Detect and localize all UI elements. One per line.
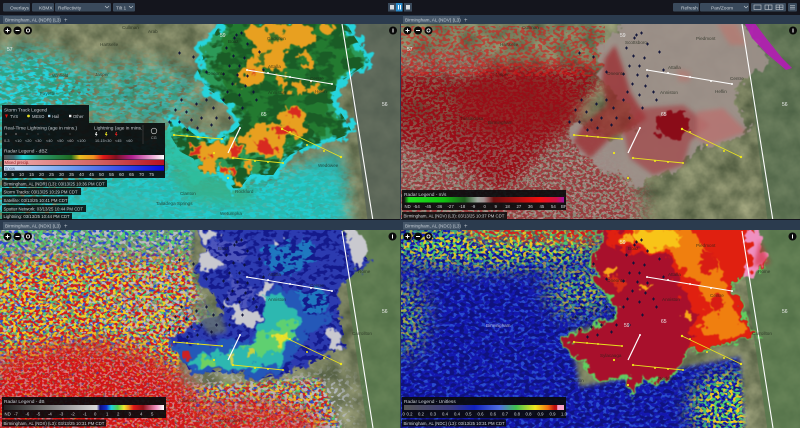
lightning legend: <20 — [25, 139, 31, 143]
radar legend: velocity: 54 — [551, 204, 556, 209]
radar legend: reflectivity: 50 — [99, 172, 105, 177]
panel: differential reflectivity map (bottom left) — [0, 230, 400, 428]
radar legend: unitless: 0.9 — [550, 412, 556, 416]
speed and height values: bottom left: 56 — [382, 309, 388, 315]
radar legend: decibels: 1 — [106, 412, 109, 416]
toolbar select: pan zoom — [700, 3, 749, 12]
timestamp: bottom left — [2, 420, 106, 426]
map labels: bottom left: Wetumpka — [218, 418, 240, 423]
radar legend: velocity: 9 — [494, 204, 498, 209]
map labels: top left: Rockford — [235, 189, 254, 194]
storm track legend: TVS — [10, 114, 18, 119]
radar legend: unitless: 0.2 — [418, 412, 425, 416]
radar legend: decibels: -5 — [36, 412, 41, 416]
timestamps: top left: Satellite: 03/13/25 10:41 PM CDT — [4, 198, 68, 203]
map labels: top right: Birmingham — [488, 120, 513, 125]
lightning legend: 10-15 — [95, 139, 105, 143]
panel: correlation coefficient map (bottom right) — [401, 230, 800, 428]
speed and height values: top left — [7, 33, 388, 118]
map labels: top left: Boaz — [228, 39, 239, 44]
timestamps: top left — [2, 180, 107, 220]
map labels: bottom right: Clanton — [568, 378, 584, 383]
toolbar select: pan zoom: Pan/Zoom — [711, 5, 733, 11]
radar legend: reflectivity: 75 — [149, 172, 155, 177]
tab bar: top left — [0, 15, 400, 24]
radar legend: velocity: 27 — [516, 204, 522, 209]
map labels: top right: Hartselle — [500, 42, 519, 47]
lightning legend: <100 — [77, 139, 86, 143]
storm track legend: Hail — [52, 114, 59, 119]
radar legend: unitless — [402, 397, 568, 418]
map labels: bottom left: Clanton — [180, 398, 196, 403]
map labels: top left: Wedowee — [318, 163, 339, 168]
lightning legend: <10 — [15, 139, 21, 143]
storm track legend: MESO — [32, 114, 45, 119]
radar legend: decibels: 0 — [94, 412, 97, 416]
toolbar button: refresh — [673, 3, 699, 12]
radar legend: reflectivity: Snow — [4, 166, 16, 171]
map labels: top left: Hartselle — [100, 42, 119, 47]
map labels: top left: Jasper — [95, 72, 109, 77]
tab bar: top right: + — [464, 18, 468, 24]
radar legend: reflectivity: 65 — [129, 172, 135, 177]
radar legend: reflectivity: 70 — [139, 172, 145, 177]
lightning legend: <40 — [46, 139, 52, 143]
radar legend: decibels: -6 — [26, 412, 30, 416]
map labels: top left: Arab — [148, 29, 158, 34]
radar legend: unitless: 1.0 — [561, 412, 568, 416]
lightning legend: <60 — [67, 139, 73, 143]
radar legend: reflectivity: 40 — [79, 172, 85, 177]
speed and height values: bottom right: 65 — [661, 319, 667, 325]
map labels: bottom right: Attalla — [668, 272, 681, 277]
playback controls — [388, 3, 412, 12]
layout buttons — [751, 3, 786, 12]
radar legend: reflectivity: 25 — [49, 172, 55, 177]
timestamps: top left: Lightning: 03/13/25 10:44 PM CDT — [4, 214, 70, 219]
radar legend: reflectivity: 5 — [12, 172, 14, 177]
toolbar button: overlays — [3, 3, 30, 12]
map labels: top left: Centre — [310, 76, 324, 81]
speed and height values: top left: 56 — [382, 102, 388, 108]
map labels: top right: Scottsboro — [625, 40, 647, 45]
toolbar button: overlays: Overlays — [10, 5, 30, 11]
lightning legend: <30 — [35, 139, 41, 143]
map labels: bottom right: Oneonta — [607, 278, 625, 283]
panel: reflectivity map (top left) — [0, 24, 400, 219]
speed and height values: top right: 56 — [782, 102, 788, 108]
radar legend: unitless: 0 — [402, 412, 406, 416]
radar legend: reflectivity: 30 — [59, 172, 65, 177]
map labels: bottom right: Piedmont — [696, 243, 716, 248]
map labels: bottom right: Rome — [758, 269, 771, 274]
radar legend: velocity: -45 — [425, 204, 432, 209]
radar legend: unitless: 0.5 — [466, 412, 472, 416]
map labels: top left: Oneonta — [207, 71, 225, 76]
radar legend: decibels: ND — [4, 412, 11, 416]
lightning legend: Real-Time Lightning (age in mins.) — [4, 126, 78, 132]
map labels: top left: Cullman — [122, 25, 139, 30]
lightning legend: <45 — [115, 139, 121, 143]
lightning legend: CG — [151, 136, 157, 140]
storm track legend: Other — [73, 114, 84, 119]
radar legend: decibels: -4 — [48, 412, 52, 416]
radar legend: decibels: 4 — [140, 412, 143, 416]
speed and height values: top left: 57 — [7, 47, 13, 53]
map labels: bottom right: Carrollton — [752, 331, 772, 336]
radar legend: decibels — [2, 397, 166, 418]
radar legend: unitless: 0.9 — [538, 412, 544, 416]
radar legend: velocity: -18 — [459, 204, 466, 209]
toolbar select: product — [55, 3, 111, 12]
radar legend: unitless: 0.6 — [478, 412, 484, 416]
lightning legend: <30 — [105, 139, 111, 143]
radar legend: reflectivity: 20 — [39, 172, 45, 177]
map labels: bottom right: Rockford — [658, 376, 677, 381]
map controls: top left — [4, 26, 397, 34]
radar legend: decibels: -1 — [83, 412, 87, 416]
speed and height values: bottom right — [620, 240, 788, 329]
map labels: top right: Cullman — [522, 25, 539, 30]
map labels: bottom left: Boaz — [218, 246, 229, 251]
radar legend: velocity: ND — [404, 204, 411, 209]
map labels: top left: Anniston — [268, 90, 286, 95]
radar legend: unitless: 0.4 — [454, 412, 461, 416]
radar legend: velocity — [402, 190, 567, 210]
map labels: top right: Heflin — [715, 89, 727, 94]
tab bar: top left: Birmingham, AL (NDR) (L3) — [5, 18, 61, 22]
speed and height values: top right: 59 — [620, 33, 626, 39]
timestamp: bottom left: Birmingham, AL (NDX) (L3): 03/13/25 10:31 PM CDT — [4, 421, 105, 426]
radar legend: unitless: Radar Legend - Unitless — [404, 399, 456, 405]
storm track legend: Storm Track Legend — [4, 108, 48, 114]
map labels: top left: Gadsden — [267, 36, 286, 41]
radar legend: decibels: -2 — [71, 412, 75, 416]
menu button — [788, 3, 797, 12]
tab bar: bottom right: Birmingham, AL (NDC) (L3) — [405, 224, 461, 228]
radar legend: unitless: 0.6 — [490, 412, 497, 416]
tab bar: bottom left: Birmingham, AL (NDX) (L3) — [5, 224, 61, 228]
map controls: top right — [404, 26, 797, 34]
speed and height values: bottom right: 59 — [624, 323, 630, 329]
radar legend: reflectivity: 0 — [4, 172, 7, 177]
map labels: top right: Jasper — [495, 72, 509, 77]
map labels: bottom left: Rome — [358, 269, 371, 274]
radar legend: reflectivity — [2, 146, 165, 178]
map labels: top left: Winfield — [52, 73, 69, 78]
map controls: bottom left — [4, 232, 396, 240]
radar legend: reflectivity: 15 — [29, 172, 35, 177]
timestamp: top right: Birmingham, AL (NDV) (L3): 03/13/25 10:37 PM CDT — [404, 213, 505, 218]
panel: velocity map (top right) — [401, 24, 800, 219]
tab bar: top right: Birmingham, AL (NDV) (L3) — [405, 18, 461, 22]
radar legend: reflectivity: 55 — [109, 172, 115, 177]
speed and height values: top left: 59 — [220, 33, 226, 39]
radar legend: velocity: -27 — [448, 204, 454, 209]
radar legend: velocity: -36 — [436, 204, 443, 209]
speed and height values: top right: 57 — [407, 47, 413, 53]
tab bar: bottom left — [0, 220, 400, 230]
map labels: bottom right: Centre — [710, 293, 724, 298]
radar legend: reflectivity: 60 — [119, 172, 125, 177]
lightning legend: <50 — [57, 139, 63, 143]
radar legend: reflectivity: 10 — [19, 172, 25, 177]
speed and height values: bottom right: 59 — [620, 240, 626, 246]
map labels: top left: Fayette — [40, 91, 56, 96]
tab bar: top right — [401, 15, 800, 24]
speed and height values: bottom right: 56 — [782, 309, 788, 315]
speed and height values: top left: 65 — [261, 112, 267, 118]
map labels: bottom left: Carrollton — [352, 331, 372, 336]
radar legend: decibels: Radar Legend - dB — [4, 399, 45, 405]
lightning legend: Lightning (age in mins.) — [94, 126, 144, 132]
radar legend: reflectivity: Radar Legend - dBZ — [4, 148, 48, 154]
map labels: top right: Piedmont — [696, 36, 716, 41]
speed and height values: top right: 65 — [661, 112, 667, 118]
radar legend: decibels: -3 — [60, 412, 64, 416]
radar legend: reflectivity: 35 — [69, 172, 75, 177]
lightning legend: 0-3 — [4, 139, 10, 143]
map labels: top left: Talladega Springs — [156, 201, 193, 206]
tab bar: top left: + — [64, 18, 68, 24]
radar legend: velocity: 18 — [505, 204, 510, 209]
map labels: top left: Clanton — [180, 191, 196, 196]
radar legend: decibels: 2 — [117, 412, 120, 416]
radar legend: unitless: 0.4 — [442, 412, 449, 416]
timestamps: top left: Storm Tracks: 03/13/25 10:29 PM CDT — [4, 189, 78, 194]
map labels: top left: Attalla — [268, 64, 281, 69]
toolbar select: tilt: Tilt 1 — [116, 5, 127, 11]
map labels: top right: Anniston — [660, 90, 678, 95]
radar legend: velocity: BF — [561, 204, 567, 209]
storm track legend — [2, 105, 89, 123]
radar legend: reflectivity: Mixed precip. — [4, 160, 29, 165]
map labels: top right: Centre — [730, 76, 744, 81]
radar legend: velocity: 0 — [484, 204, 486, 209]
map labels: bottom left: Centre — [310, 283, 324, 288]
lightning legend — [2, 123, 165, 146]
radar legend: velocity: 36 — [528, 204, 533, 209]
radar legend: unitless: 0.2 — [406, 412, 413, 416]
toolbar button: radar site — [32, 3, 54, 12]
map labels: top right: Tuscaloosa — [460, 116, 484, 121]
timestamps: top left: Spotter Network: 03/13/25 10:44 PM CDT — [4, 206, 83, 211]
radar legend: unitless: 0.7 — [502, 412, 509, 416]
map labels: bottom right — [486, 243, 772, 383]
map labels: bottom right: Birmingham — [486, 323, 511, 328]
map labels: bottom left — [180, 246, 372, 423]
radar legend: decibels: 5 — [151, 412, 154, 416]
speed and height values: top right — [407, 33, 788, 118]
map labels: top right: Attalla — [668, 65, 681, 70]
toolbar button: refresh: Refresh — [681, 5, 698, 11]
radar legend: velocity: -54 — [414, 204, 420, 209]
map labels: top right — [460, 25, 744, 125]
map labels: top right: Oneonta — [607, 71, 625, 76]
map labels: bottom right: Sylacauga — [600, 353, 622, 358]
radar legend: decibels: 3 — [128, 412, 132, 416]
timestamp: top right — [402, 212, 507, 219]
timestamps: top left: Birmingham, AL (NDR) (L3): 03/13/25 10:36 PM CDT — [4, 181, 105, 186]
tab bar: bottom left: + — [64, 224, 68, 230]
radar legend: reflectivity: 45 — [89, 172, 95, 177]
radar legend: unitless: 0.8 — [514, 412, 521, 416]
map labels: top left: Wetumpka — [220, 211, 242, 216]
toolbar select: product: Reflectivity — [58, 5, 82, 11]
tab bar: bottom right: + — [464, 224, 468, 230]
tab bar: bottom right — [401, 220, 800, 230]
radar legend: decibels: -7 — [14, 412, 18, 416]
radar legend: unitless: 0.3 — [430, 412, 437, 416]
toolbar select: tilt — [113, 3, 135, 12]
map labels: top left: Heflin — [315, 89, 327, 94]
toolbar button: radar site: KBMX — [39, 5, 53, 11]
map labels: top left — [40, 25, 339, 216]
map labels: bottom right: Boaz — [628, 246, 639, 251]
map labels: bottom left: Anniston — [268, 297, 286, 302]
top toolbar — [0, 0, 800, 15]
map labels: bottom left: Attalla — [268, 272, 281, 277]
timestamp: bottom right: Birmingham, AL (NDC) (L3): 03/13/25 10:31 PM CDT — [404, 421, 505, 426]
lightning legend: <60 — [126, 139, 132, 143]
timestamp: bottom right — [402, 420, 506, 426]
radar legend: unitless: 0.8 — [526, 412, 532, 416]
map controls: bottom right — [404, 232, 796, 240]
radar legend: velocity: 45 — [540, 204, 545, 209]
radar legend: velocity: -9 — [472, 204, 476, 209]
radar legend: velocity: Radar Legend - m/s — [404, 192, 447, 198]
map labels: bottom right: Anniston — [662, 297, 680, 302]
